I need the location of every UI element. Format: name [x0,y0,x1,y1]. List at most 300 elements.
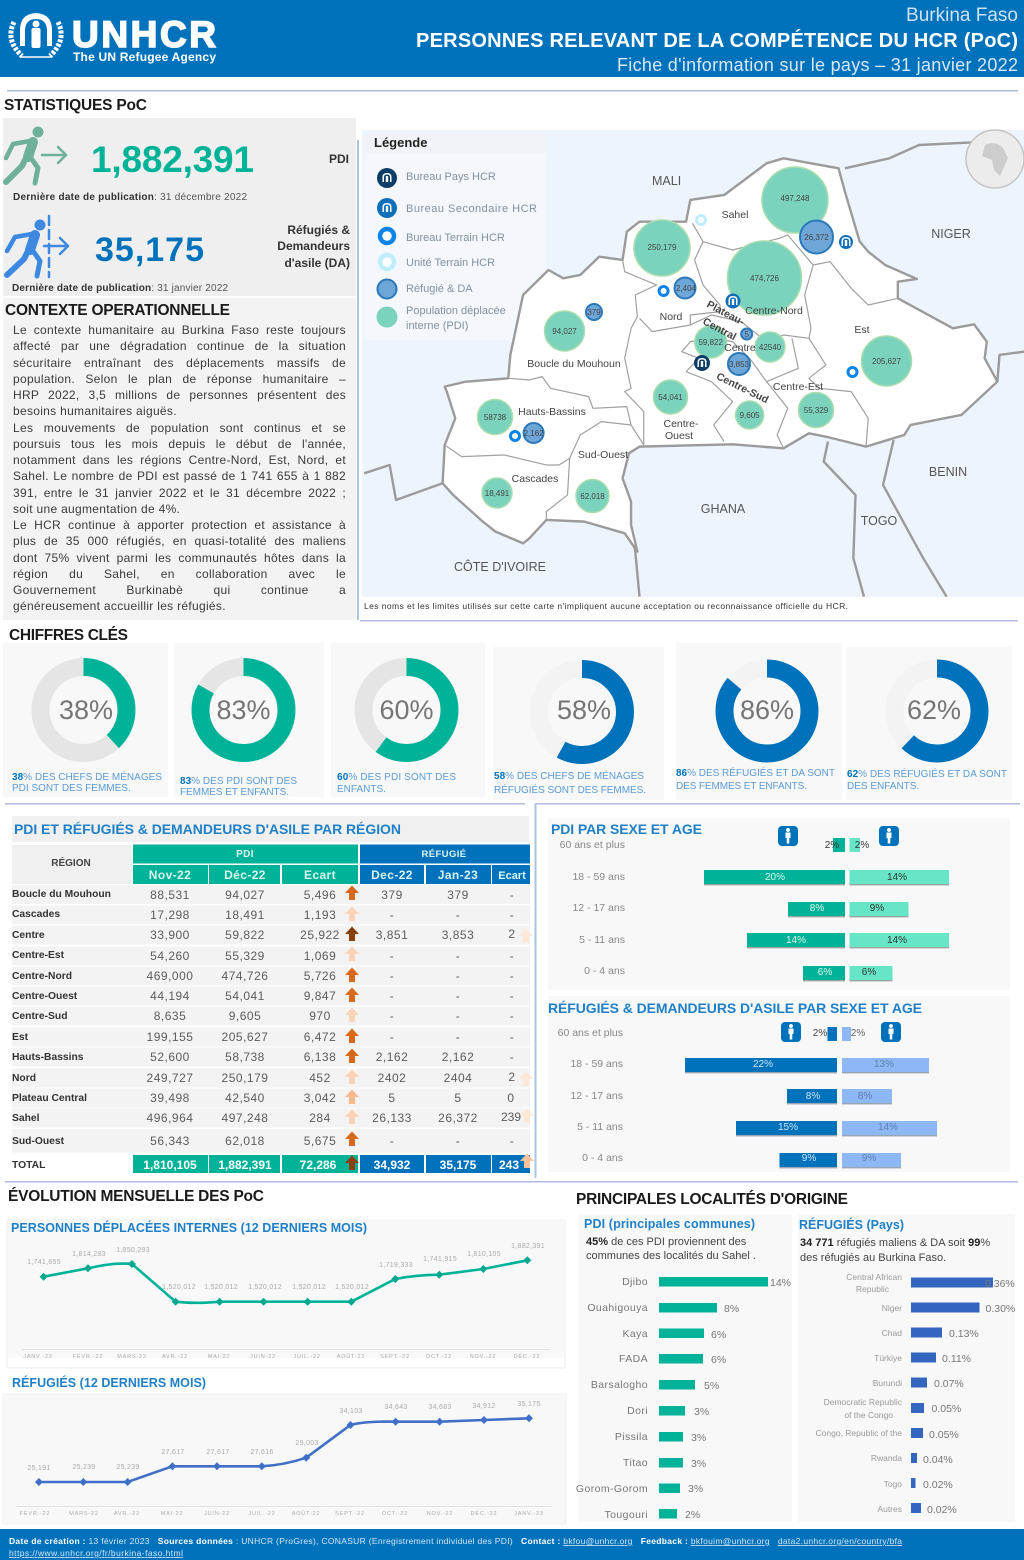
table rows: 42,540 [225,1091,265,1105]
panel: IDP by sex and age [548,818,1010,990]
bubble values: 379 [587,308,601,317]
data labels: 1,814,283 [72,1251,106,1258]
table rows: 9,847 [304,989,336,1003]
publication date: refugees: Dernière date de publication: 31 janvier 2022 [12,283,228,294]
age labels: 0 - 4 ans [582,1152,623,1164]
publication date: IDP: Dernière date de publication: 31 décembre 2022 [13,192,247,203]
region labels: Centre-Est [773,381,823,393]
country names: Democratic Republic [824,1397,903,1407]
table rows: - [390,1009,394,1023]
panel: key figure 38%: 38% [59,695,113,725]
table total row: 243 [499,1158,519,1172]
panel title: PDI (principales communes) [584,1217,755,1231]
bar values: 8% [806,1091,820,1102]
table rows: 1,069 [304,949,336,963]
footer [0,1529,1024,1560]
bubble values: 58738 [484,413,507,422]
text block: operational context: 391, entre le 31 janvier 2022 et le 31 décembre 2022 ; [13,486,346,500]
panel: key figure 38%: PDI SONT DES FEMMES. [12,783,131,794]
table rows: 2 [508,927,516,941]
table total row: 1,882,391 [218,1158,272,1172]
table total row: 72,286 [300,1158,337,1172]
bar values: 0.02% [923,1479,953,1491]
month axis: SEPT.-22 [380,1354,410,1360]
panel: key figure 86% [676,643,842,800]
table total row [12,1155,530,1173]
table rows: 5 [388,1091,396,1105]
panel: key figure 60% [331,643,485,797]
table rows: - [456,1009,460,1023]
table rows: 469,000 [147,969,193,983]
table rows: 39,498 [150,1091,190,1105]
legend: Population déplacée [406,305,506,317]
data labels: 35,175 [517,1401,541,1408]
data labels: 1,520,012 [248,1284,282,1291]
table rows: 0 [507,1091,515,1105]
table rows: 379 [381,888,403,902]
table rows: 3,042 [304,1091,336,1105]
text block: operational context: population. Selon le plan de réponse humanitaire – [13,372,346,386]
bubbles: internally displaced population [478,167,912,512]
heading: main localities of origin: PRINCIPALES LOCALITÉS D'ORIGINE [576,1191,848,1208]
table rows: 250,179 [222,1071,268,1085]
month axis: FÉVR.-22 [20,1510,50,1517]
region labels: Sahel [722,209,748,221]
heading: monthly evolution: ÉVOLUTION MENSUELLE DES PoC [8,1188,264,1205]
month axis: OCT.-22 [382,1511,408,1517]
table rows: 44,194 [150,989,190,1003]
table rows: 2404 [444,1071,472,1085]
table rows: 496,964 [147,1111,193,1125]
bar values: 3% [688,1483,703,1495]
panel note: 45% [586,1236,608,1248]
bar values: 0.07% [934,1378,964,1390]
bar values: 2% [851,1028,865,1039]
table rows: - [390,949,394,963]
header titles [416,5,1018,75]
table rows: Centre-Est [12,950,65,961]
bubble values: 497,248 [781,194,810,203]
bubble values: 205,627 [872,357,902,366]
data labels: 1,741,655 [27,1259,61,1266]
label: refugees and asylum seekers: Réfugiés & [287,223,350,237]
bar values [685,1277,791,1521]
table header: Ecart [498,870,526,882]
chart title: refugees: RÉFUGIÉS (12 DERNIERS MOIS) [12,1375,206,1390]
country labels: GHANA [701,502,746,516]
footer: https://www.unhcr.org/fr/burkina-faso.html [9,1548,183,1558]
panel: key figure 83%: FEMMES ET ENFANTS. [180,787,289,798]
panel: key figure 62%: DES ENFANTS. [847,781,919,792]
panel: key figure 62%: 62% [907,695,961,725]
bar values: 9% [802,1153,816,1164]
data labels: 1,520,012 [162,1284,196,1291]
map disclaimer: Les noms et les limites utilisés sur cette carte n'impliquent aucune acceptation ou reconnaissance officielle du HCR. [364,601,848,611]
age labels: 18 - 59 ans [572,871,625,883]
table rows: Centre-Nord [12,971,72,982]
country labels: TOGO [861,514,898,528]
table rows [12,885,530,1152]
bar values: 6% [711,1354,726,1366]
table rows: 52,600 [150,1050,190,1064]
text block: operational context: Les mouvements de population sont continus et se [13,420,346,434]
month axis [23,1353,540,1360]
bar values: 14% [786,935,806,946]
region labels: Boucle du Mouhoun [527,358,621,370]
header titles: PERSONNES RELEVANT DE LA COMPÉTENCE DU HCR (PoC) [416,29,1018,52]
neighbouring borders [364,142,1024,597]
legend: Légende [374,135,427,150]
bars: women [842,1027,937,1167]
month axis: MARS-22 [117,1354,147,1360]
table rows: - [456,989,460,1003]
table header: Déc-22 [224,868,266,882]
bubble values [484,194,902,501]
table rows: 2 [508,1070,516,1084]
data labels: 1,741,915 [423,1256,457,1263]
text block: operational context: affecté par une dégradation continue de la situation [13,339,346,353]
bubbles: refugees and asylum seekers [524,220,833,443]
table rows: 54,260 [150,949,190,963]
table rows: - [510,1050,514,1064]
region labels: Hauts-Bassins [518,406,586,418]
month axis: SEPT.-22 [335,1511,365,1517]
table rows: Hauts-Bassins [12,1052,84,1063]
table header: PDI [236,849,254,860]
panel note: communes des localités du Sahel . [586,1250,756,1262]
commune names: Ouahigouya [587,1302,648,1314]
bubble values: 2,404 [676,284,697,293]
bars: women [850,838,949,980]
month axis: FÉVR.-22 [73,1353,103,1360]
table rows: 199,155 [147,1030,193,1044]
icon: refugee runner [7,216,68,277]
bar values: 6% [711,1329,726,1341]
bar values: 0.02% [927,1504,957,1516]
table header: Dec-22 [371,868,413,882]
bar values: 0.11% [942,1353,971,1365]
commune names: Pissila [615,1431,648,1443]
bar values: 0.13% [949,1328,979,1340]
bar values: 8% [858,1091,872,1102]
table header [12,844,530,884]
bar values: 0.30% [986,1303,1015,1315]
bubble values: 3,853 [729,360,750,369]
icon: female [879,826,899,846]
table rows: 94,027 [225,888,265,902]
table rows: 5,496 [304,888,336,902]
commune names: Barsalogho [591,1379,648,1391]
table rows: 5,675 [304,1134,336,1148]
panel: key figure 60%: 60% [379,695,434,725]
bar values: 13% [874,1059,894,1070]
table rows: 5 [454,1091,462,1105]
legend: Bureau Secondaire HCR [406,203,537,215]
country labels: CÔTE D'IVOIRE [454,559,546,574]
panel note: de ces PDI proviennent des [608,1236,747,1248]
country names: of the Congo [844,1410,893,1420]
bubble values: 54,041 [658,393,683,402]
chart title: RÉFUGIÉS & DEMANDEURS D'ASILE PAR SEXE ET AGE [548,1000,922,1016]
region labels: Central [701,316,738,343]
legend: Bureau Terrain HCR [406,232,505,244]
table header: RÉFUGIÉ [421,849,467,860]
data labels: 25,239 [116,1464,140,1471]
panel: key figure 62%: 62% DES RÉFUGIÉS ET DA SONT [847,767,1007,780]
text block: operational context: Le contexte humanitaire au Burkina Faso reste toujours [13,323,346,337]
table rows: 3,853 [442,928,474,942]
country names: Autres [877,1504,902,1514]
data labels: 1,520,012 [335,1284,369,1291]
panel: refugees by sex and age [548,996,1010,1172]
table rows: Est [12,1032,29,1043]
panel note: réfugiés maliens & DA soit 99% [837,1237,990,1249]
text block: operational context: dont 75% vivent parmi les communautés hôtes dans la [13,550,346,564]
data labels: 1,520,012 [292,1284,326,1291]
table rows: 56,343 [150,1134,190,1148]
commune names: Tougouri [605,1509,648,1521]
table rows: 9,605 [229,1009,261,1023]
panel: key figure 58%: 58% [557,695,611,725]
table rows: 5,726 [304,969,336,983]
chart title: PERSONNES DÉPLACÉES INTERNES (12 DERNIERS MOIS) [11,1220,367,1235]
panel note: des réfugiés au Burkina Faso. [800,1252,946,1264]
table rows: 54,041 [225,989,265,1003]
panel: key figure 38%: 38% DES CHEFS DE MÉNAGES [12,770,162,783]
bubble values: 94,027 [552,327,577,336]
commune names: Kaya [622,1328,648,1340]
legend: Bureau Pays HCR [406,171,496,183]
bar values: 14% [887,872,907,883]
data labels [27,1401,541,1472]
table header: Jan-23 [438,868,478,882]
month axis: JUIN-22 [250,1354,276,1360]
table rows: 2,162 [376,1050,408,1064]
footer: Date de création : 13 février 2023 Sources données : UNHCR (ProGres), CONASUR (Enregistrement individuel des PDI) Contact : bkfou@unhcr.org Feedback : bkfouim@unhcr.org data2.unhcr.org/en/country/bfa [9,1536,902,1546]
legend: interne (PDI) [406,320,468,332]
panel: key figure 60%: 60% DES PDI SONT DES [337,772,456,783]
region labels: Centre-Sud [714,371,770,406]
country names: Togo [884,1479,902,1489]
table rows: 58,738 [225,1050,265,1064]
label: refugees and asylum seekers: d'asile (DA) [284,256,350,270]
text block: operational context: généreusement accueillir les réfugiés. [13,599,226,613]
text block: operational context: besoins humanitaires aiguës. [13,404,177,418]
age labels: 18 - 59 ans [570,1058,623,1070]
data labels: 27,617 [161,1449,185,1456]
data labels: 27,616 [250,1449,274,1456]
table: IDPs and refugees by region [12,816,534,1173]
table rows: - [456,908,460,922]
panel: key figure 83%: 83% DES PDI SONT DES [180,776,297,787]
country names: Türkiye [874,1353,902,1363]
panel: key figure 60%: ENFANTS. [337,784,386,795]
month axis: AOÛT-22 [337,1353,365,1360]
region labels: Centre- [663,418,699,430]
bubble values: 474,726 [750,274,780,283]
table rows: 249,727 [147,1071,193,1085]
label: PDI: PDI [329,152,349,166]
bubble values: 250,179 [648,243,677,252]
table rows: 26,372 [438,1111,478,1125]
table rows: - [390,908,394,922]
table rows: - [510,1134,514,1148]
data labels: 29,003 [295,1440,319,1447]
table header: RÉGION [51,856,91,869]
bar values: 0.36% [985,1278,1015,1290]
month axis: JUIN-22 [204,1511,230,1517]
chart title: PDI PAR SEXE ET AGE [551,821,702,837]
table rows: 1,193 [304,908,336,922]
bar values: 8% [724,1303,739,1315]
panel: key figure 86%: 86% DES RÉFUGIÉS ET DA SONT [676,766,835,779]
heading: statistiques: STATISTIQUES PoC [4,97,147,114]
header titles: Burkina Faso [906,5,1018,26]
panel: key figure 58%: 58% DES CHEFS DE MÉNAGES [494,769,644,782]
country names: Burundi [873,1378,902,1388]
panel: refugee countries of origin [798,1214,1015,1522]
line series [40,1256,531,1306]
table total row: 1,810,105 [143,1158,197,1172]
panel title: RÉFUGIÉS (Pays) [799,1217,904,1232]
text block: operational context: Gouvernement Burkinabè qui continue a [13,583,346,597]
table rows: - [390,1030,394,1044]
bar values: 8% [810,903,824,914]
data labels: 1,719,333 [379,1262,413,1269]
country names: Congo, Republic of the [816,1428,902,1438]
text block: operational context: HRP 2022, 3,5 millions de personnes présentent des [13,388,346,402]
table rows: - [390,989,394,1003]
bar values [753,1028,898,1164]
age labels: 5 - 11 ans [577,1121,623,1133]
number: refugees: 35,175 [95,231,204,269]
globe inset [966,130,1024,188]
data labels: 25,191 [27,1465,51,1472]
month axis: MARS-22 [69,1511,99,1517]
table rows: Boucle du Mouhoun [12,889,111,900]
table rows: 62,018 [225,1134,265,1148]
table header: Nov-22 [149,868,191,882]
bar values: 20% [765,872,785,883]
panel: context background [3,298,356,620]
table rows: 17,298 [150,908,190,922]
table total row: TOTAL [12,1160,45,1171]
bar values: 2% [685,1509,700,1521]
month axis: DÉC.-22 [471,1510,497,1517]
UNHCR logo: UNHCR [72,14,216,55]
text block: operational context: Le HCR continue à apporter protection et assistance à [13,518,346,532]
age labels [558,1027,623,1164]
month axis: MAI-22 [208,1354,230,1360]
bar values [765,840,907,978]
table rows: - [456,1134,460,1148]
commune names: Gorom-Gorom [576,1483,648,1495]
month axis [20,1510,544,1517]
age labels: 0 - 4 ans [584,965,625,977]
bar values: 14% [770,1277,791,1289]
month axis: AOÛT-22 [292,1510,320,1517]
table rows: Nord [12,1073,36,1084]
table rows: - [510,949,514,963]
table rows: Centre-Sud [12,1011,68,1022]
table header: Ecart [304,868,336,882]
table rows: Cascades [12,909,60,920]
chart: refugees last 12 months [3,1394,566,1524]
panel: key figure 83% [174,643,324,798]
data labels: 1,520,012 [204,1284,238,1291]
table rows: 497,248 [222,1111,268,1125]
bar values: 3% [694,1406,709,1418]
commune names: Dori [627,1405,648,1417]
commune names: Djibo [622,1276,648,1288]
data labels: 1,882,391 [511,1243,545,1250]
panel: key figure 86%: DES FEMMES ET ENFANTS. [676,781,807,792]
table rows: 2,162 [442,1050,474,1064]
panel: key figure 58% [493,647,664,800]
table rows: 379 [447,888,469,902]
month axis: JANV.-23 [514,1511,544,1517]
table rows: - [510,1030,514,1044]
text block: operational context: soit une augmentation de 4%. [13,502,180,516]
bar values: 0.04% [923,1454,953,1466]
bar values: 9% [870,903,884,914]
map [362,130,1024,597]
table rows: 25,922 [300,928,340,942]
bars [911,1278,993,1513]
bubble values: 2,162 [524,429,544,438]
table rows: 33,900 [150,928,190,942]
Burkina Faso regions [443,158,997,552]
month axis: JANV.-22 [23,1354,53,1360]
table rows: 55,329 [225,949,265,963]
data labels: 34,643 [384,1404,408,1411]
country names: Chad [882,1328,902,1338]
commune names [576,1276,648,1521]
age labels: 12 - 17 ans [570,1090,623,1102]
data labels: 34,103 [339,1408,363,1415]
chart: IDPs last 12 months [7,1220,565,1368]
bubble values: 26,372 [804,233,829,242]
table rows: 59,822 [225,928,265,942]
country names [816,1272,903,1514]
region labels: Sud-Ouest [578,449,628,461]
region labels: Cascades [512,473,558,485]
table rows: 18,491 [225,908,265,922]
month axis: NOV.-22 [427,1511,453,1517]
bars: men [704,838,845,980]
table rows: - [390,969,394,983]
table rows: 6,138 [304,1050,336,1064]
data labels: 27,617 [206,1449,230,1456]
bars [659,1277,768,1518]
month axis: NOV.-22 [470,1354,496,1360]
country labels: NIGER [931,227,971,241]
bar values: 0.05% [932,1403,961,1415]
table rows: - [390,1134,394,1148]
age labels: 12 - 17 ans [572,902,625,914]
bubble values: 42540 [759,343,782,352]
bar values: 14% [878,1122,898,1133]
commune names: Titao [623,1457,648,1469]
line series [35,1414,533,1486]
bar values: 2% [855,840,869,851]
table rows: 26,133 [372,1111,412,1125]
text block: operational context: plus de 35 000 réfugiés, en quasi-totalité des maliens [13,534,346,548]
bar values: 0.05% [929,1429,959,1441]
table rows: 239 [501,1110,521,1124]
month axis: OCT.-22 [426,1354,452,1360]
country names: Republic [856,1284,890,1294]
